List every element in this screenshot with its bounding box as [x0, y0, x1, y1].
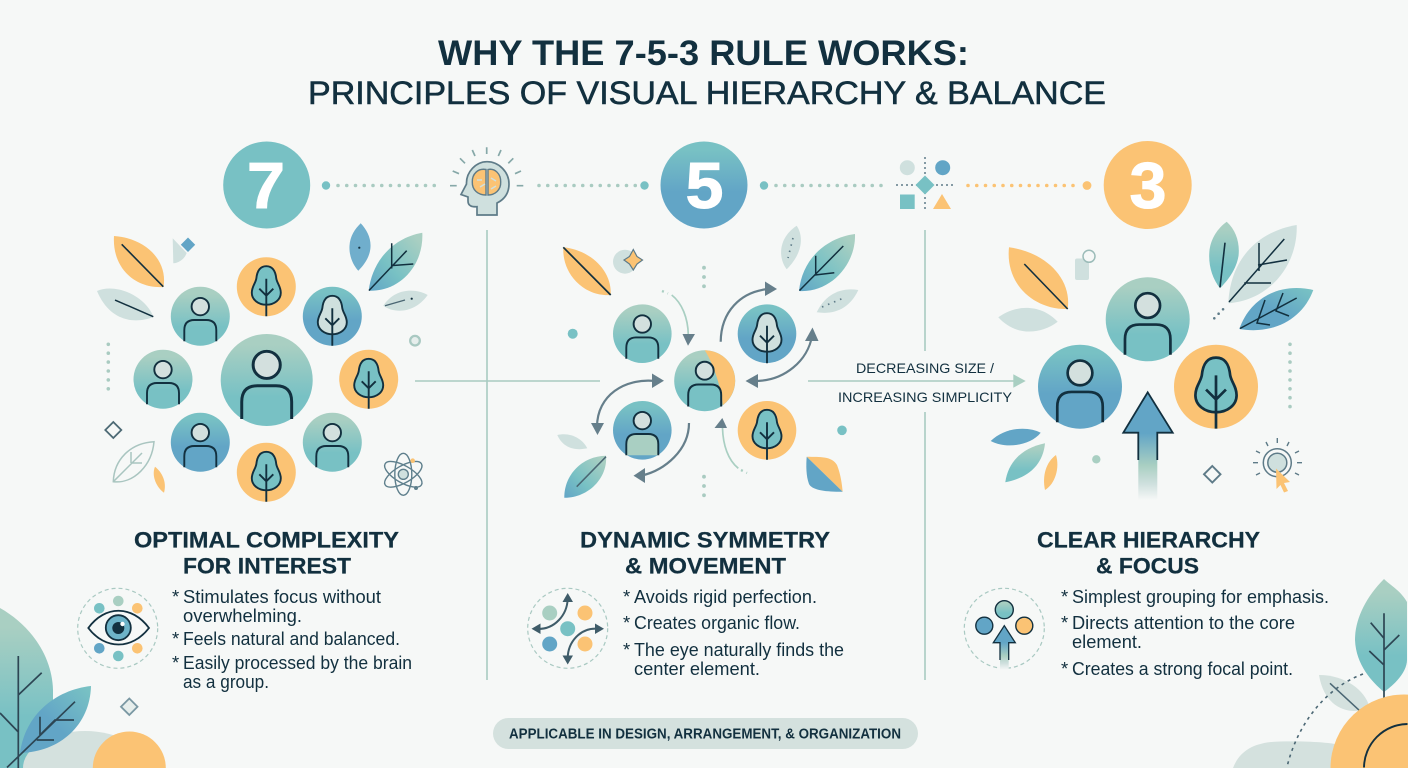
decorative leaves — [557, 226, 858, 498]
heading: clear hierarchy: & FOCUS — [1096, 554, 1199, 578]
title: WHY THE 7-5-3 RULE WORKS: — [438, 33, 969, 73]
number 5 badge — [660, 142, 748, 228]
dividers and axis lines — [415, 230, 1026, 680]
text: dynamic symmetry bullets: The eye naturally finds the — [634, 639, 844, 660]
title: PRINCIPLES OF VISUAL HIERARCHY & BALANCE — [308, 75, 1106, 111]
text: optimal complexity bullets: * — [172, 586, 179, 607]
up arrow — [1123, 392, 1173, 500]
text: optimal complexity bullets: as a group. — [183, 671, 269, 692]
corner art: bottom left — [0, 608, 166, 768]
icon: flow — [528, 588, 608, 668]
axis label: decreasing size: INCREASING SIMPLICITY — [838, 389, 1013, 405]
text: dynamic symmetry bullets — [623, 586, 844, 679]
text: clear hierarchy bullets: element. — [1072, 631, 1142, 652]
heading: optimal complexity: FOR INTEREST — [183, 554, 351, 578]
axis label: decreasing size: DECREASING SIZE / — [856, 360, 994, 376]
text: optimal complexity bullets: * — [172, 628, 179, 649]
upper right tree — [738, 304, 796, 363]
text: optimal complexity bullets — [172, 586, 412, 692]
right tree — [1174, 345, 1258, 429]
right tree — [339, 350, 398, 409]
footer pill: APPLICABLE IN DESIGN, ARRANGEMENT, & ORGANIZATION — [509, 726, 901, 742]
lower right person — [303, 413, 362, 472]
text: clear hierarchy bullets: Directs attention to the core — [1072, 612, 1295, 633]
lower left person — [613, 401, 672, 460]
text: dynamic symmetry bullets: center element. — [634, 658, 760, 679]
text: dynamic symmetry bullets: * — [623, 639, 630, 660]
heading: dynamic symmetry — [580, 528, 830, 578]
text: clear hierarchy bullets: * — [1061, 658, 1068, 679]
title — [308, 33, 1106, 111]
decorative leaves — [991, 222, 1313, 490]
heading: clear hierarchy — [1037, 528, 1260, 578]
number 7 badge — [223, 142, 310, 228]
top tree — [237, 257, 296, 316]
text: optimal complexity bullets: Easily processed by the brain — [183, 652, 412, 673]
center person — [674, 350, 735, 411]
icon: eye — [78, 588, 158, 668]
upper left person — [613, 304, 672, 363]
text: clear hierarchy bullets: * — [1061, 612, 1068, 633]
connector dots — [322, 181, 1091, 190]
text: dynamic symmetry bullets: Creates organic flow. — [634, 612, 800, 633]
text: dynamic symmetry bullets: Avoids rigid perfection. — [634, 586, 817, 607]
text: clear hierarchy bullets: * — [1061, 586, 1068, 607]
icon: atom — [381, 453, 426, 495]
left person — [134, 350, 192, 409]
corner art: bottom right — [1233, 579, 1408, 768]
heading: clear hierarchy: CLEAR HIERARCHY — [1037, 528, 1260, 552]
heading: dynamic symmetry: DYNAMIC SYMMETRY — [580, 528, 830, 552]
panel: five-element cluster — [557, 226, 858, 498]
top person — [1106, 277, 1190, 361]
text: clear hierarchy bullets: Creates a strong focal point. — [1072, 658, 1293, 679]
text: optimal complexity bullets: Stimulates focus without — [183, 586, 381, 607]
panel: three-element cluster — [991, 222, 1313, 500]
text: optimal complexity bullets: * — [172, 652, 179, 673]
icon: focus arrow — [964, 588, 1044, 670]
icon: click target — [1253, 438, 1302, 492]
icon: head with brain — [450, 147, 523, 215]
text: dynamic symmetry bullets: * — [623, 586, 630, 607]
left person — [1038, 345, 1122, 429]
footer pill — [493, 718, 918, 749]
text: dynamic symmetry bullets: * — [623, 612, 630, 633]
number 3 badge: 3 — [1130, 149, 1166, 222]
lower right tree — [738, 401, 796, 460]
heading: dynamic symmetry: & MOVEMENT — [625, 554, 786, 578]
flow arrows — [591, 282, 818, 483]
upper right tree — [303, 287, 362, 346]
text: optimal complexity bullets: overwhelming. — [183, 605, 302, 626]
heading: optimal complexity: OPTIMAL COMPLEXITY — [134, 528, 399, 552]
icon: shapes grid — [896, 157, 955, 212]
bottom tree — [237, 443, 296, 502]
number 5 badge: 5 — [686, 149, 724, 222]
decorative leaves — [97, 223, 428, 493]
heading: optimal complexity — [134, 528, 399, 578]
text: optimal complexity bullets: Feels natural and balanced. — [183, 628, 400, 649]
text: clear hierarchy bullets — [1061, 586, 1329, 679]
axis label: decreasing size — [838, 360, 1013, 405]
upper left person — [171, 287, 230, 346]
number 7 badge: 7 — [247, 149, 285, 222]
number 3 badge — [1104, 141, 1192, 229]
text: clear hierarchy bullets: Simplest grouping for emphasis. — [1072, 586, 1329, 607]
panel: seven-element cluster — [97, 223, 428, 502]
center person — [221, 334, 313, 426]
lower left person — [171, 413, 230, 472]
